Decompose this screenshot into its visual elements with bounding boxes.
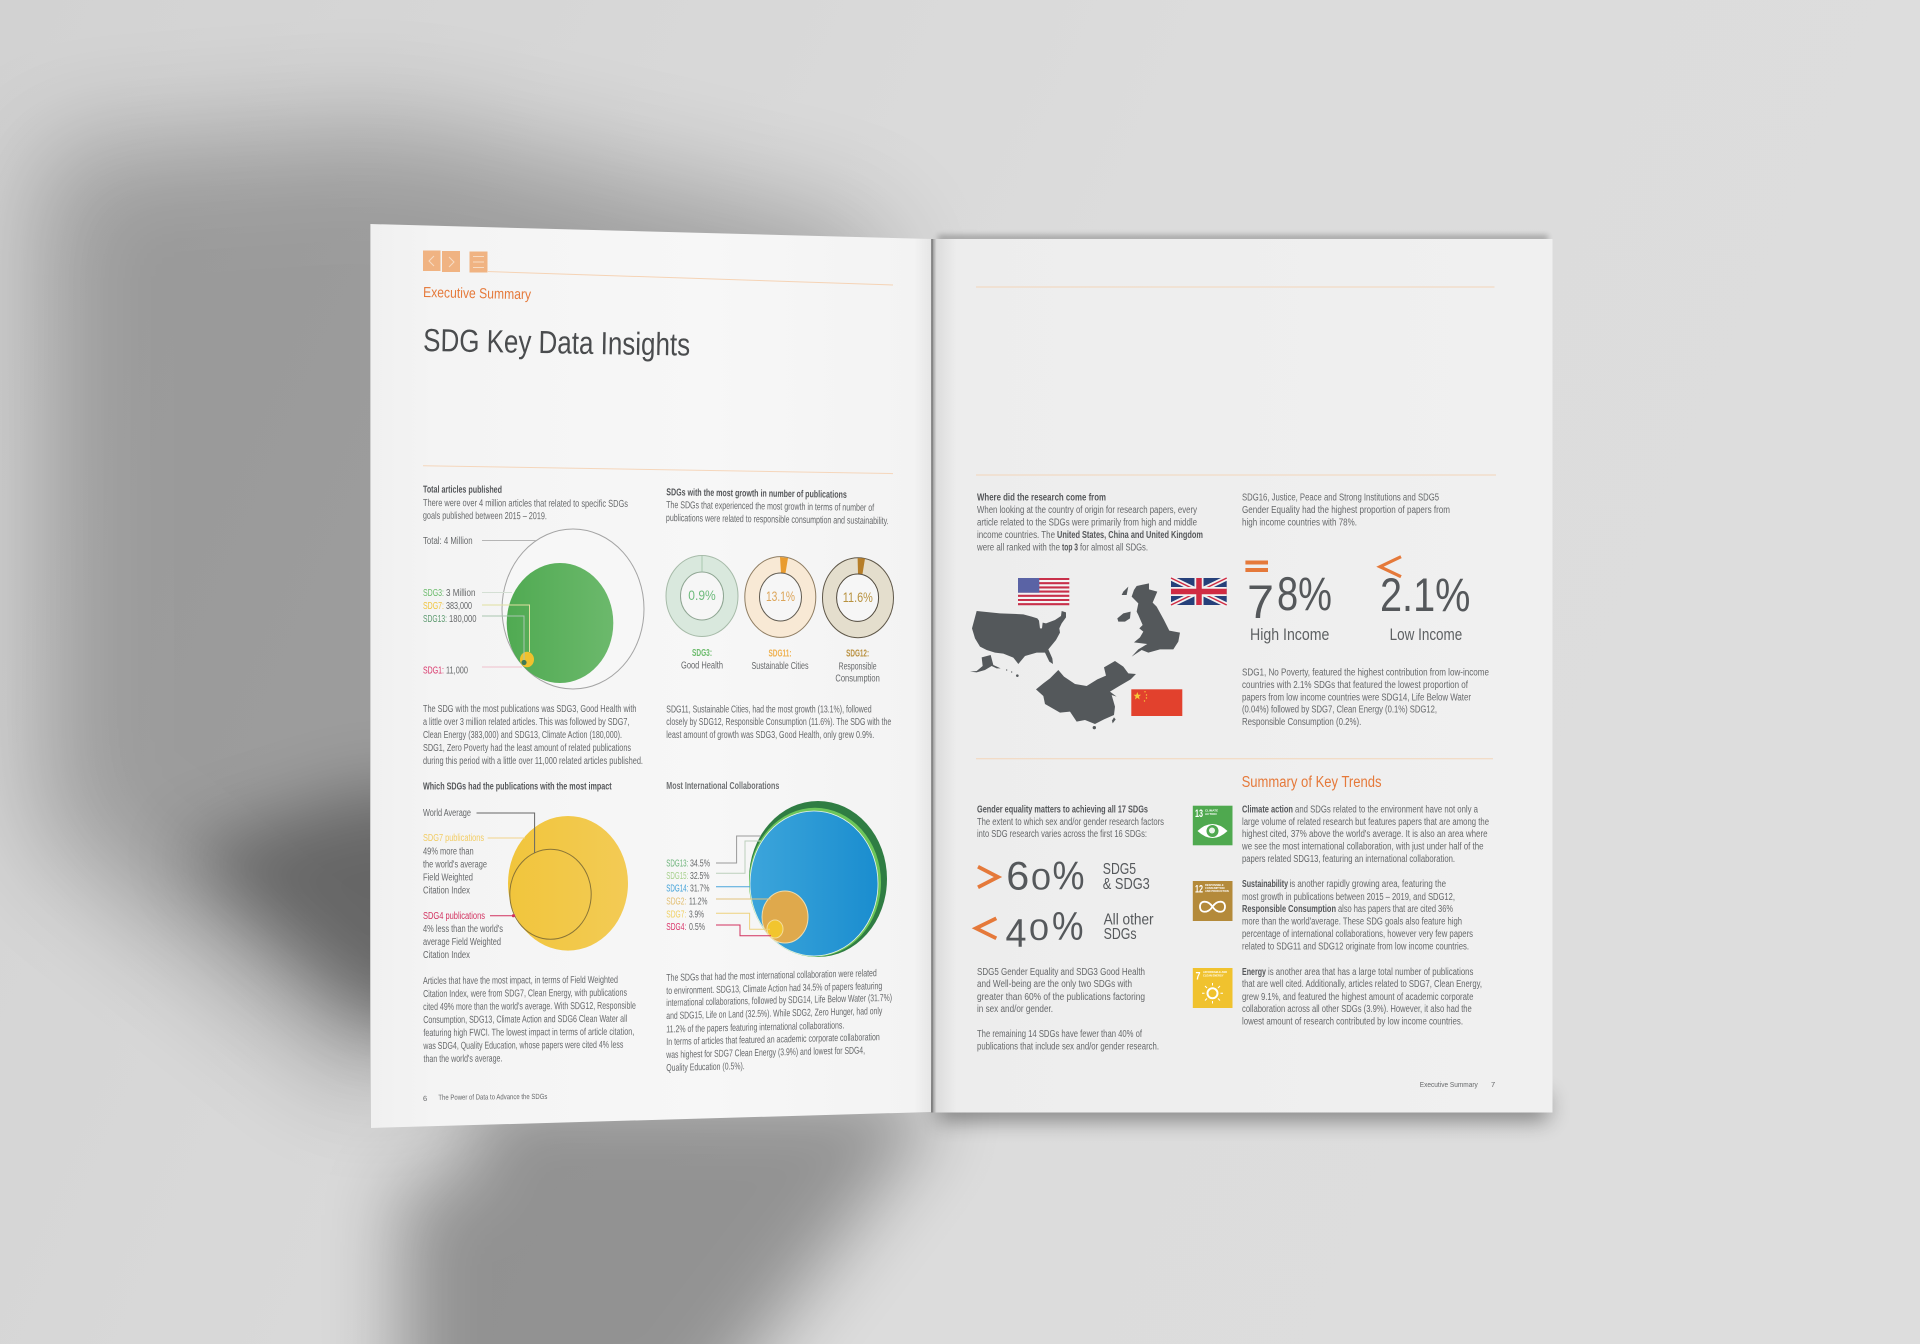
paragraph: during this period with a little over 11,000 related articles published. <box>423 756 643 767</box>
panel: right page <box>932 239 1552 1112</box>
chart labels: 31.7% <box>690 884 710 894</box>
block: gender equality <box>976 804 1164 1052</box>
text: energy: lowest amount of research contributed by low income countries. <box>1242 1016 1463 1028</box>
donut: SDG12 11.6% <box>822 558 894 684</box>
paragraph: Quality Education (0.5%). <box>666 1061 745 1074</box>
chart labels: 32.5% <box>690 871 710 882</box>
chart labels: 11,000 <box>446 666 468 676</box>
stat: less than 40%: 4 <box>1006 912 1026 956</box>
stat: 2.1% low income: 2.1% <box>1380 568 1470 621</box>
chart labels: 383,000 <box>446 601 472 612</box>
paragraph: cited 49% more than the world's average. With SDG12, Responsible <box>423 1001 636 1013</box>
paragraph: Consumption, SDG13, Climate Action and SDG6 Clean Water all <box>423 1014 627 1026</box>
stat: 2.1% low income <box>1380 557 1470 644</box>
block: most international collaborations <box>666 781 892 1074</box>
icon: SDG 12 responsible consumption: 12 <box>1195 884 1203 896</box>
text: sustainability: related to SDG11 and SDG12 originate from low income countries. <box>1242 942 1469 952</box>
text: sustainability: percentage of international collaborations, however very few papers <box>1242 929 1473 940</box>
text: sustainability: more than the world'average. These SDG goals also feature high <box>1242 916 1462 928</box>
text: sustainability: is another rapidly growing area, featuring the <box>1290 879 1446 890</box>
donut: SDG3 0.9%: 0.9% <box>688 587 716 603</box>
donut: SDG11 13.1%: SDG11: <box>768 648 792 660</box>
icon: SDG 12 responsible consumption: RESPONSIBLE <box>1205 883 1224 887</box>
text: sustainability: Responsible Consumption <box>1242 904 1336 915</box>
paragraph <box>977 967 1159 1052</box>
paragraph: The SDG with the most publications was SDG3, Good Health with <box>423 704 636 715</box>
footer: left page: 6 <box>423 1094 427 1103</box>
paragraph <box>422 975 636 1065</box>
text: energy: collaboration across all other SDGs (3.9%). However, it also had the <box>1242 1004 1472 1015</box>
intro text: SDGs with the most growth in number of publications <box>666 487 847 501</box>
paragraph: and Well-being are the only two SDGs with <box>977 979 1132 990</box>
text: sustainability: Sustainability <box>1242 879 1288 890</box>
block: where research comes from: article related to the SDGs were primarily from high and middle <box>977 518 1197 528</box>
paragraph: 11.2% of the papers featuring international collaborations. <box>666 1020 844 1035</box>
intro text: publications were related to responsible consumption and sustainability. <box>666 513 889 527</box>
paragraph: than the world's average. <box>423 1054 502 1065</box>
block: where research comes from: Where did the research come from <box>977 492 1106 504</box>
block: where research comes from: for almost all SDGs. <box>1080 542 1148 554</box>
stat: 2.1% low income: Low Income <box>1390 625 1462 644</box>
text: sustainability <box>1242 879 1473 952</box>
chart labels: average Field Weighted <box>423 937 501 948</box>
intro text: Gender equality matters to achieving all 17 SDGs <box>977 804 1148 816</box>
chart labels <box>666 858 710 933</box>
icon: SDG 7 clean energy: AFFORDABLE AND <box>1203 970 1227 974</box>
text: sustainability: most growth in publications between 2015 – 2019, and SDG12, <box>1242 892 1455 903</box>
stat: 78% high income <box>1245 562 1332 644</box>
stat: less than 40%: 0 <box>1029 914 1049 947</box>
paragraph: low income contribution: (0.04%) followed by SDG7, Clean Energy (0.1%) SDG12, <box>1242 704 1437 716</box>
title: SDG Key Data Insights <box>423 322 690 363</box>
chart: nested circles of articles <box>482 529 644 689</box>
stat: greater than 60%: % <box>1052 854 1084 898</box>
stat: greater than 60%: 0 <box>1031 863 1051 896</box>
donut: SDG11 13.1% <box>745 557 816 672</box>
intro text: There were over 4 million articles that related to specific SDGs <box>423 498 628 510</box>
icon: SDG 7 clean energy <box>1193 968 1232 1008</box>
heading: Summary of Key Trends <box>1242 774 1382 791</box>
paragraph: In terms of articles that featured an academic corporate collaboration <box>666 1032 880 1048</box>
text: climate action <box>1241 804 1489 865</box>
paragraph <box>666 968 892 1074</box>
chart labels: SDG7: <box>423 601 444 612</box>
icon: SDG 7 clean energy: 7 <box>1196 970 1200 982</box>
stat: less than 40%: % <box>1052 905 1084 949</box>
donut: SDG3 0.9%: Good Health <box>681 660 723 672</box>
chart labels: 49% more than <box>423 846 474 858</box>
chart labels: Citation Index <box>423 886 470 896</box>
stat: 78% high income: 8% <box>1277 567 1332 620</box>
intro text <box>977 804 1164 840</box>
chart labels: 4% less than the world's <box>423 924 503 935</box>
intro text: Total articles published <box>423 485 502 496</box>
right page sheet <box>932 239 1552 1112</box>
chart labels: 180,000 <box>449 614 477 625</box>
chart: collaboration circles <box>716 801 887 957</box>
chart labels <box>423 808 503 961</box>
left page sheet <box>370 224 931 1128</box>
flag: China <box>1131 689 1182 716</box>
chart labels: SDG14: <box>666 884 688 894</box>
paragraph: Articles that have the most impact, in terms of Field Weighted <box>423 975 618 987</box>
paragraph: to environment. SDG13, Climate Action had 34.5% of papers featuring <box>666 981 882 997</box>
icon: SDG 13 climate action <box>1193 806 1232 845</box>
text: climate action: large volume of related research but features papers that are among the <box>1242 817 1489 828</box>
intro text: into SDG research varies across the first 16 SDGs: <box>977 829 1147 840</box>
chart labels: 3.9% <box>689 910 704 920</box>
heading: Most International Collaborations <box>666 781 780 792</box>
paragraph: SDG11, Sustainable Cities, had the most growth (13.1%), followed <box>666 704 872 716</box>
paragraph: in sex and/or gender. <box>977 1004 1053 1015</box>
block: where research comes from: were all ranked with the <box>976 542 1060 554</box>
chart labels: SDG7: <box>666 910 686 920</box>
chart labels: Field Weighted <box>423 872 473 884</box>
block: growth in publications <box>666 487 894 741</box>
text: energy: that are well cited. Additionally, articles related to SDG7, Clean Energy, <box>1242 979 1482 990</box>
chart: impact circles <box>476 813 628 951</box>
chart labels: SDG15: <box>666 871 688 882</box>
stat: greater than 60%: 6 <box>1006 854 1029 898</box>
stat: greater than 60% <box>978 854 1150 898</box>
intro text <box>423 485 628 523</box>
block: total articles published <box>423 485 644 767</box>
flag: United Kingdom <box>1171 578 1227 605</box>
map: China <box>1036 661 1136 729</box>
text: climate action: and SDGs related to the environment have not only a <box>1295 804 1478 816</box>
paragraph: low income contribution <box>1242 668 1489 728</box>
paragraph: Clean Energy (383,000) and SDG13, Climate Action (180,000). <box>423 730 622 741</box>
block: publications with the most impact <box>422 782 636 1065</box>
text: climate action: Climate action <box>1242 804 1293 816</box>
chart labels: SDG3: <box>423 588 444 599</box>
map: USA <box>970 611 1066 677</box>
paragraph: Citation Index, were from SDG7, Clean Energy, with publications <box>423 988 627 1000</box>
paragraph: low income contribution: papers from low income countries were SDG14, Life Below Water <box>1242 692 1472 704</box>
chart labels: SDG13: <box>423 614 447 625</box>
donut: SDG11 13.1%: Sustainable Cities <box>752 661 808 672</box>
chart labels: Citation Index <box>423 950 470 961</box>
chart labels: 34.5% <box>690 858 710 870</box>
paragraph: low income contribution: SDG1, No Poverty, featured the highest contribution from low-income <box>1242 668 1489 678</box>
icon: SDG 12 responsible consumption: CONSUMPTION <box>1205 886 1225 890</box>
paragraph: SDG5 Gender Equality and SDG3 Good Health <box>977 967 1145 978</box>
stat: less than 40% <box>976 905 1154 956</box>
paragraph <box>423 704 643 767</box>
block: where research comes from: top 3 <box>1062 542 1078 554</box>
heading: Which SDGs had the publications with the most impact <box>423 782 612 792</box>
paragraph: SDG1, Zero Poverty had the least amount of related publications <box>423 743 631 754</box>
block: high income proportion text: high income countries with 78%. <box>1242 518 1357 528</box>
chart labels: the world's average <box>423 860 487 870</box>
text: climate action: highest cited, 37% above the world's average. It is also an area where <box>1242 829 1488 840</box>
text: energy <box>1242 967 1482 1028</box>
stat: 78% high income: High Income <box>1250 625 1329 644</box>
block: high income proportion text: Gender Equality had the highest proportion of papers from <box>1242 505 1450 516</box>
donut: SDG3 0.9% <box>666 556 738 672</box>
block: where research comes from: income countries. The <box>977 530 1055 541</box>
paragraph: greater than 60% of the publications factoring <box>977 992 1145 1003</box>
flag: United States <box>1018 578 1069 605</box>
donut: SDG12 11.6%: SDG12: <box>846 648 869 660</box>
intro text: The SDGs that experienced the most growth in terms of number of <box>666 500 874 514</box>
block: summary of key trends <box>1193 774 1489 1028</box>
text: energy: Energy <box>1242 967 1266 978</box>
block: high income proportion text <box>1242 492 1450 528</box>
block: where research comes from <box>976 492 1203 554</box>
text: energy: grew 9.1%, and featured the highest amount of academic corporate <box>1242 992 1474 1003</box>
icon: SDG 13 climate action: CLIMATE <box>1205 808 1218 812</box>
intro text <box>666 487 889 527</box>
donut: SDG12 11.6%: Responsible <box>839 662 877 672</box>
panel: left page <box>370 224 931 1128</box>
paragraph: least amount of growth was SDG3, Good Health, only grew 0.9%. <box>666 730 874 741</box>
block: high income proportion text: SDG16, Justice, Peace and Strong Institutions and SDG5 <box>1242 492 1439 504</box>
donut: SDG3 0.9%: SDG3: <box>692 648 712 659</box>
paragraph: closely by SDG12, Responsible Consumption (11.6%). The SDG with the <box>666 717 892 728</box>
chart labels: SDG7 publications <box>423 833 484 844</box>
chart labels <box>423 536 477 676</box>
paragraph: The SDGs that had the most international collaboration were related <box>666 968 877 984</box>
icon: SDG 13 climate action: ACTION <box>1205 812 1216 816</box>
icon: SDG 12 responsible consumption: AND PRODUCTION <box>1205 889 1229 893</box>
icon: SDG 7 clean energy: CLEAN ENERGY <box>1203 974 1224 978</box>
footer: right page: Executive Summary <box>1420 1080 1478 1089</box>
chart labels: SDG1: <box>423 666 444 676</box>
stat: less than 40%: All other <box>1104 912 1154 929</box>
paragraph: was highest for SDG7 Clean Energy (3.9%) and lowest for SDG4, <box>666 1045 865 1061</box>
paragraph: featuring high FWCI. The lowest impact in terms of article citation, <box>423 1027 634 1039</box>
chart labels: 3 Million <box>446 588 476 599</box>
paragraph: a little over 3 million related articles. This was followed by SDG7, <box>423 717 629 728</box>
text: climate action: we see the most international collaboration, with just under half of the <box>1241 842 1484 852</box>
footer: left page: The Power of Data to Advance the SDGs <box>438 1092 548 1102</box>
stat: greater than 60%: SDG5 <box>1103 861 1136 878</box>
donut: SDG12 11.6%: Consumption <box>835 674 880 684</box>
text: sustainability: also has papers that are cited 36% <box>1338 904 1453 915</box>
paragraph: publications that include sex and/or gender research. <box>977 1042 1159 1052</box>
text: energy: is another area that has a large total number of publications <box>1268 967 1473 978</box>
chart labels: 11.2% <box>689 896 708 908</box>
text: climate action: papers related SDG13, featuring an international collaboration. <box>1242 854 1455 865</box>
footer: right page: 7 <box>1491 1080 1495 1089</box>
icon: SDG 12 responsible consumption <box>1193 881 1232 921</box>
map: United Kingdom <box>1117 583 1180 657</box>
chart labels: SDG4: <box>666 922 686 933</box>
paragraph: low income contribution: Responsible Consumption (0.2%). <box>1242 717 1361 728</box>
icon: SDG 13 climate action: 13 <box>1195 808 1203 820</box>
stat: greater than 60%: & SDG3 <box>1103 876 1150 893</box>
stat: 78% high income: 7 <box>1247 575 1274 628</box>
chart labels: Total: 4 Million <box>423 536 473 547</box>
map: USA, UK and China with flags <box>970 578 1227 729</box>
paragraph: international collaborations, followed by SDG14, Life Below Water (31.7%) <box>666 993 892 1009</box>
block: where research comes from: When looking at the country of origin for research papers, every <box>977 505 1197 516</box>
chart labels: World Average <box>423 808 471 819</box>
donut: SDG11 13.1%: 13.1% <box>766 588 795 604</box>
stat: less than 40%: SDGs <box>1104 926 1137 943</box>
navigation buttons <box>423 250 488 272</box>
chart labels: SDG4 publications <box>423 911 485 922</box>
paragraph: low income contribution: countries with 2.1% SDGs that featured the lowest proportion of <box>1242 680 1468 691</box>
block: where research comes from: United States, China and United Kingdom <box>1057 530 1203 541</box>
footer: left page <box>423 1092 548 1103</box>
chart labels: 0.5% <box>689 922 705 933</box>
paragraph <box>666 704 892 741</box>
section label: Executive Summary: Executive Summary <box>423 285 532 303</box>
intro text: The extent to which sex and/or gender research factors <box>977 817 1164 828</box>
paragraph: was SDG4, Quality Education, whose papers were cited 4% less <box>423 1040 623 1052</box>
donut: SDG12 11.6%: 11.6% <box>843 589 873 605</box>
paragraph: The remaining 14 SDGs have fewer than 40% of <box>977 1029 1142 1040</box>
intro text: goals published between 2015 – 2019. <box>423 511 547 522</box>
chart labels: SDG2: <box>666 896 686 908</box>
paragraph: and SDG15, Life on Land (32.5%). While SDG2, Zero Hunger, had only <box>666 1006 882 1022</box>
chart labels: SDG13: <box>666 858 688 870</box>
